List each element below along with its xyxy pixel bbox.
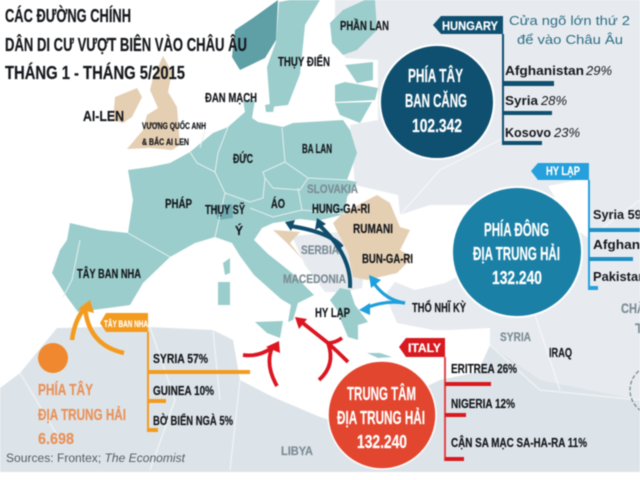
land: Mediterranean islands: [218, 258, 392, 358]
circle: central Mediterranean total: TRUNG TÂM: [347, 383, 416, 404]
arrows: eastern Mediterranean route: [359, 275, 405, 315]
bar chart: Italy origins: CẬN SA MẠC SA-HA-RA 11%: [451, 435, 587, 450]
white patch: inland sea: [548, 178, 588, 238]
country labels: Ý: [235, 223, 243, 238]
tag: Hungary: HUNGARY: [442, 19, 498, 33]
bar chart: Spain origins: GUINEA 10%: [153, 383, 214, 398]
circle: eastern Mediterranean total: [452, 187, 582, 317]
bar chart: Hungary origins: Kosovo: [505, 126, 551, 140]
bar chart: Hungary origins: 29%: [585, 64, 612, 78]
land: Baltic states: [335, 62, 378, 123]
country labels: SLOVAKIA: [307, 182, 358, 196]
circle: eastern Mediterranean total: ĐỊA TRUNG HẢI: [473, 243, 560, 264]
title: [5, 5, 247, 83]
country labels: SERBIA: [301, 243, 339, 257]
bar chart: Hungary origins: 23%: [553, 126, 580, 140]
land: Finland: [330, 0, 377, 55]
bar chart: Hungary origins: Afghanistan: [505, 64, 584, 78]
icon: orange circle: [38, 343, 68, 373]
bar chart: Hungary origins: 28%: [540, 94, 567, 108]
circle: western Balkan total: BAN CĂNG: [405, 90, 467, 111]
country labels: PHẦN LAN: [340, 18, 389, 33]
country labels: TÂY BAN NHA: [77, 266, 141, 281]
bar chart: Italy origins: [444, 357, 587, 461]
tag: Greece: [531, 163, 589, 180]
dashed circle at right edge: [630, 365, 640, 415]
land: Asia and Eastern Europe: [320, 0, 640, 472]
land: Africa: [0, 327, 640, 472]
country labels: LIBYA: [281, 444, 313, 458]
country labels: ĐỨC: [233, 151, 253, 166]
bar chart: Greece origins: [588, 180, 640, 290]
country labels: PHÁP: [165, 196, 192, 211]
country labels: MACEDONIA: [283, 272, 346, 286]
circle: central Mediterranean total: 132.240: [357, 432, 407, 452]
tag: Hungary: [433, 16, 503, 34]
subtitle: second largest gateway: để vào Châu Âu: [517, 32, 623, 47]
circle: eastern Mediterranean total: 132.240: [492, 268, 542, 288]
panel: western Mediterranean route: [38, 313, 250, 448]
circle: central Mediterranean total: ĐỊA TRUNG HẢI: [337, 407, 425, 428]
tag: Italy: [399, 338, 445, 357]
panel: eastern Mediterranean route: [452, 163, 640, 317]
circle: western Balkan total: PHÍA TÂY: [408, 65, 463, 86]
land: Sweden: [267, 0, 320, 107]
country labels: & BẮC AI LEN: [142, 137, 189, 148]
bar chart: Italy origins: ERITREA 26%: [451, 361, 517, 376]
country labels: HY LẠP: [315, 305, 350, 320]
title: THÁNG 1 - THÁNG 5/2015: [5, 62, 185, 83]
arrows: western Balkan route: [285, 218, 350, 288]
country labels: ĐAN MẠCH: [205, 90, 257, 105]
country labels: AI-LEN: [83, 108, 124, 125]
land: Balkans: [292, 232, 365, 292]
bar chart: Spain origins: [147, 332, 250, 432]
country labels: HUNG-GA-RI: [312, 201, 370, 216]
subtitle: second largest gateway: [509, 13, 630, 47]
land: main European countries: [52, 100, 357, 322]
bar chart: Italy origins: NIGERIA 12%: [451, 396, 515, 411]
land: United Kingdom and Ireland: [113, 56, 180, 150]
country labels: THỤY ĐIỂN: [278, 54, 330, 69]
heading: western Mediterranean total: [38, 380, 126, 448]
circle: central Mediterranean total: [328, 361, 436, 469]
country labels: THỔ NHĨ KỲ: [412, 300, 466, 315]
bar chart: Hungary origins: Syria: [505, 94, 539, 108]
title: CÁC ĐƯỜNG CHÍNH: [5, 5, 131, 26]
tag: Greece: HY LẠP: [546, 164, 580, 178]
country labels: VƯƠNG QUỐC ANH: [142, 120, 206, 132]
panel: central Mediterranean route: [328, 338, 587, 469]
circle: western Balkan total: 102.342: [412, 116, 462, 136]
land: Croatia: [273, 230, 303, 260]
country labels: SYRIA: [500, 330, 531, 344]
country labels: ÁO: [271, 196, 285, 211]
bar chart: Spain origins: BỜ BIỂN NGÀ 5%: [153, 413, 233, 428]
land: Norway: [232, 0, 278, 70]
country labels: BUN-GA-RI: [362, 251, 413, 266]
country labels: IRAQ: [549, 345, 572, 360]
country labels: THỤY SỸ: [205, 202, 245, 217]
country labels: RUMANI: [353, 221, 393, 236]
subtitle: second largest gateway: Cửa ngõ lớn thứ 2: [509, 13, 630, 28]
land: Romania and Bulgaria: [333, 195, 413, 280]
title: DÂN DI CƯ VƯỢT BIÊN VÀO CHÂU ÂU: [5, 34, 247, 55]
heading: western Mediterranean total: 6.698: [38, 431, 74, 448]
country labels: BA LAN: [302, 141, 332, 156]
heading: western Mediterranean total: PHÍA TÂY: [38, 380, 93, 399]
bar chart: Hungary origins: [502, 34, 612, 145]
arrows: central Mediterranean route: [243, 317, 348, 386]
tag: Spain: [100, 313, 148, 332]
arrows: western Mediterranean route: [72, 300, 124, 353]
bar chart: Spain origins: SYRIA 57%: [153, 351, 208, 366]
source note: Sources: Frontex; The Economist: [6, 453, 186, 465]
panel: western Balkan route: [380, 13, 630, 159]
tag: Spain: TÂY BAN NHA: [104, 318, 148, 329]
land: Greece: [330, 288, 368, 340]
tag: Italy: ITALY: [408, 341, 441, 355]
heading: western Mediterranean total: ĐỊA TRUNG HẢI: [38, 405, 126, 424]
circle: western Balkan total: [380, 45, 494, 159]
circle: eastern Mediterranean total: PHÍA ĐÔNG: [484, 219, 549, 240]
